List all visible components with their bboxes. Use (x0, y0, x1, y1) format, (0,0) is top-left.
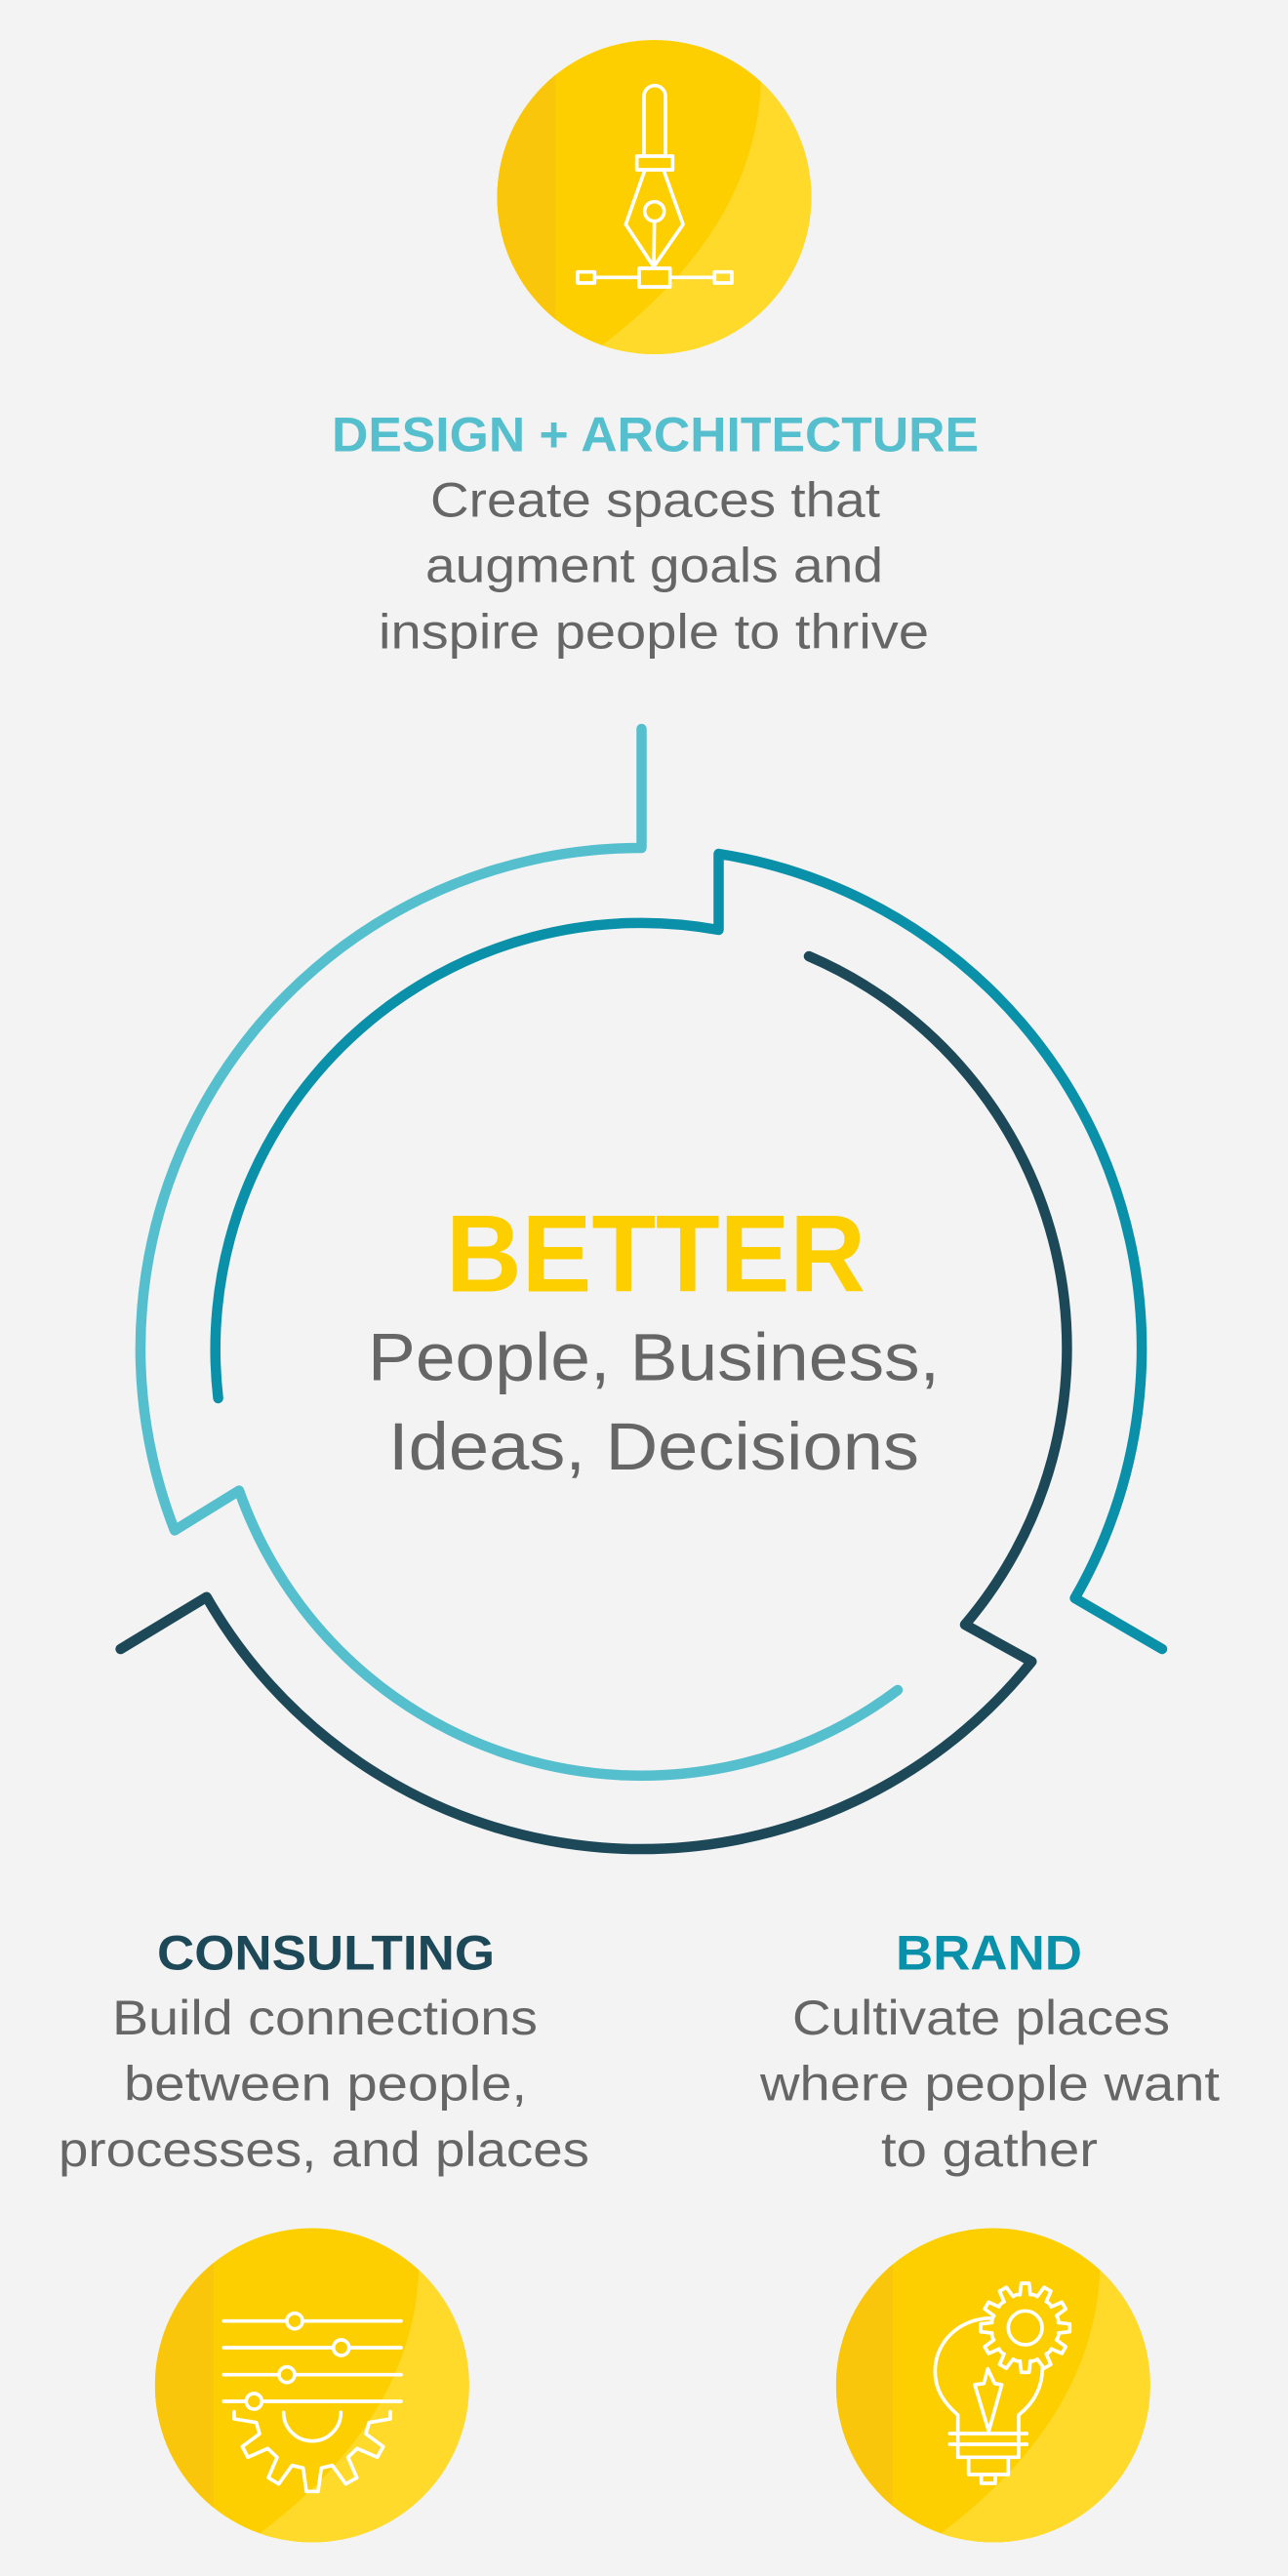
description: brand: to gather (881, 2122, 1098, 2177)
arrow ring: teal brand (216, 854, 1162, 1649)
icon: pen tool in yellow circle (498, 40, 812, 354)
description: consulting (59, 1991, 589, 2177)
description: consulting: between people, (124, 2057, 527, 2112)
center subtext (368, 1319, 940, 1484)
description: design + architecture: inspire people to thrive (379, 604, 929, 659)
description: design + architecture (379, 472, 929, 659)
arrow ring: light blue design + architecture (141, 729, 898, 1776)
center text: better (368, 1192, 940, 1484)
center subtext: People, Business, (368, 1319, 940, 1394)
center heading: BETTER (446, 1192, 865, 1314)
heading: brand: BRAND (896, 1925, 1082, 1980)
description: consulting: Build connections (112, 1991, 538, 2045)
description: design + architecture: Create spaces that (430, 472, 880, 527)
description: brand: where people want (759, 2057, 1220, 2112)
description: brand: Cultivate places (792, 1991, 1170, 2045)
icon: light bulb and gear in yellow circle (835, 2229, 1150, 2543)
description: brand (759, 1991, 1220, 2177)
description: design + architecture: augment goals and (425, 539, 883, 593)
description: consulting: processes, and places (59, 2122, 589, 2177)
text block: brand (759, 1925, 1220, 2177)
heading: design + architecture: DESIGN + ARCHITECTURE (332, 408, 979, 463)
center subtext: Ideas, Decisions (388, 1409, 919, 1484)
icon: sliders and gear in yellow circle (154, 2229, 469, 2543)
text block: design + architecture (332, 408, 979, 659)
text block: consulting (59, 1925, 589, 2177)
arrow ring: dark consulting (121, 956, 1067, 1849)
cycle diagram: three interlocking rings (121, 729, 1162, 1849)
heading: consulting: CONSULTING (157, 1925, 495, 1980)
